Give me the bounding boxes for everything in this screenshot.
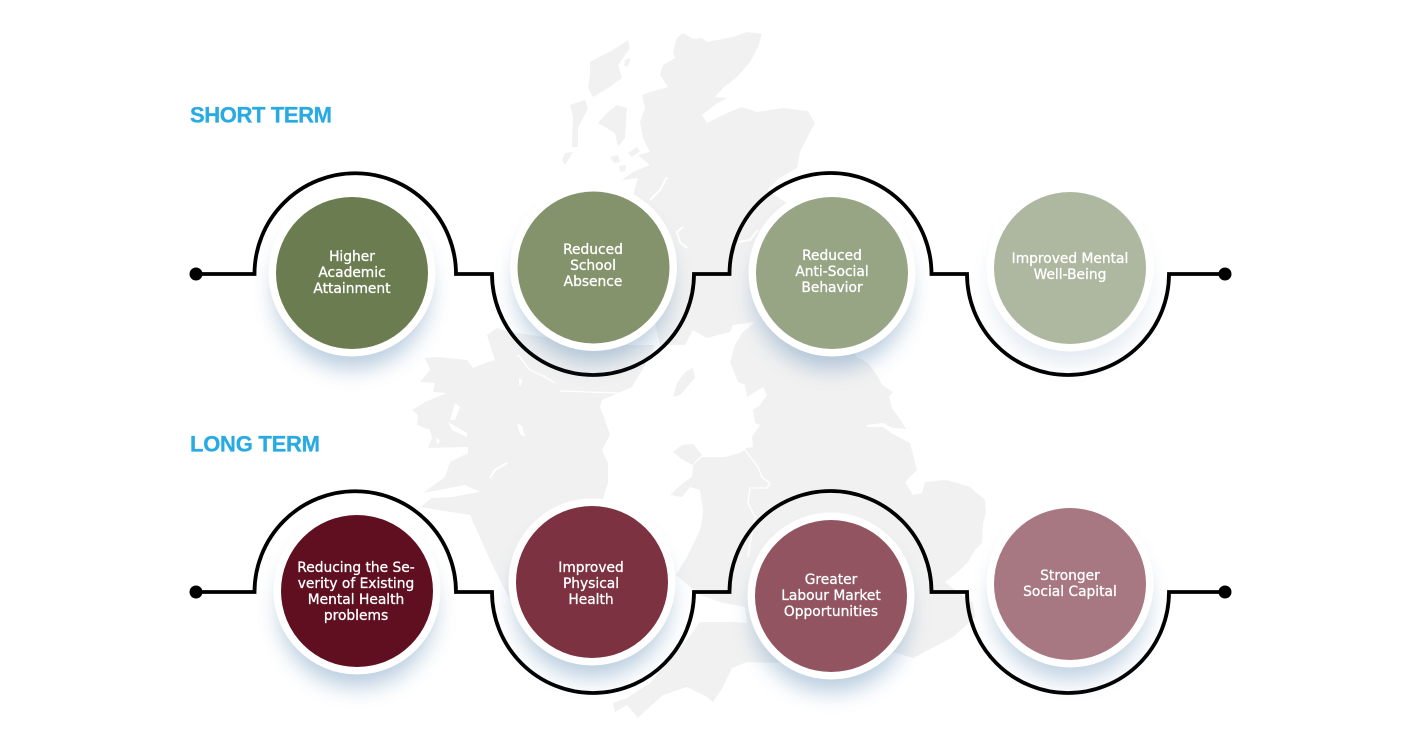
- circle: Improved Physical Health: Improved: [558, 560, 624, 576]
- circle: Improved Physical Health: Physical: [563, 576, 619, 592]
- circle: Reducing the Severity of Existing Mental Health problems: Reducing the Se-: [297, 560, 415, 576]
- circle: Stronger Social Capital: [986, 500, 1154, 680]
- circle: Improved Mental Well-Being: [986, 184, 1154, 363]
- circle: Stronger Social Capital: Stronger: [1040, 568, 1100, 584]
- circle: Higher Academic Attainment: Academic: [318, 265, 386, 281]
- circle: Reduced School Absence: School: [570, 258, 616, 274]
- circle: Reduced Anti-Social Behavior: Reduced: [802, 248, 862, 264]
- circle: Reduced School Absence: Absence: [564, 274, 622, 290]
- circle: Higher Academic Attainment: Higher: [329, 249, 375, 265]
- timeline connector: short term: [190, 173, 1232, 375]
- circle: Improved Mental Well-Being: Well-Being: [1034, 267, 1106, 283]
- circle: Greater Labour Market Opportunities: Opportunities: [784, 604, 878, 620]
- heading: long term: LONG TERM: [190, 432, 320, 456]
- background map of the UK and Ireland: [412, 32, 986, 718]
- circle: Greater Labour Market Opportunities: Greater: [805, 572, 858, 588]
- timeline connector: long term: [190, 491, 1232, 693]
- circle: Stronger Social Capital: Social Capital: [1023, 584, 1117, 600]
- heading: short term: SHORT TERM: [190, 102, 332, 128]
- circle: Reducing the Severity of Existing Mental Health problems: problems: [324, 608, 388, 624]
- circle: Reducing the Severity of Existing Mental Health problems: verity of Existing: [298, 576, 414, 592]
- circle: Greater Labour Market Opportunities: Labour Market: [781, 588, 881, 604]
- circle: Higher Academic Attainment: Attainment: [313, 281, 391, 297]
- circle: Reduced Anti-Social Behavior: Behavior: [801, 280, 863, 296]
- circle: Greater Labour Market Opportunities: [748, 512, 914, 692]
- circle: Reduced Anti-Social Behavior: [748, 190, 916, 369]
- circle: Improved Physical Health: Health: [568, 592, 614, 608]
- circle: Reduced Anti-Social Behavior: Anti-Social: [795, 264, 869, 280]
- circle: Higher Academic Attainment: [268, 190, 436, 369]
- circle: Reducing the Severity of Existing Mental Health problems: [274, 508, 440, 687]
- circle: Reducing the Severity of Existing Mental Health problems: Mental Health: [308, 592, 404, 608]
- circle: Reduced School Absence: Reduced: [563, 242, 623, 258]
- circle: Improved Mental Well-Being: Improved Mental: [1012, 251, 1128, 267]
- circle: Reduced School Absence: [510, 184, 677, 363]
- circle: Improved Physical Health: [508, 498, 676, 678]
